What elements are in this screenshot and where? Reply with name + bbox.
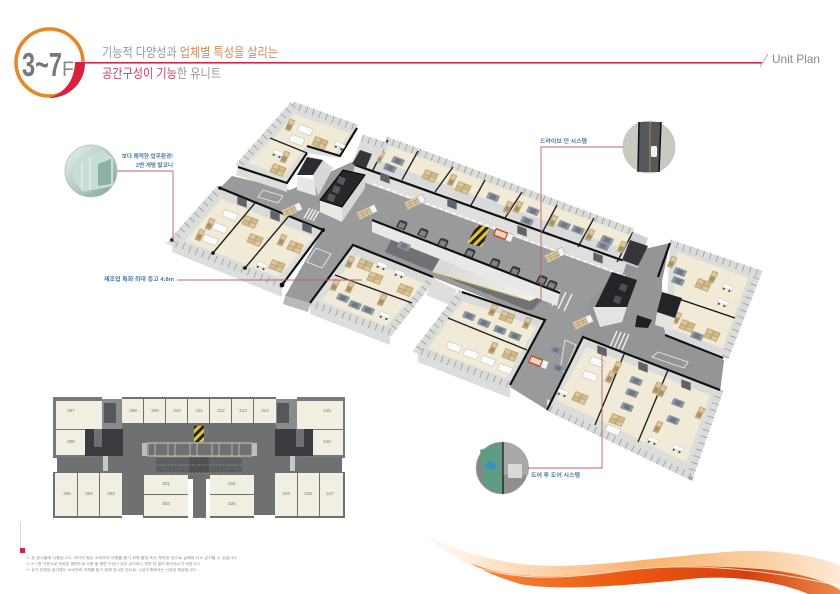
lower centre units: 301 — [162, 481, 170, 486]
header rule and Unit Plan label: Unit Plan — [772, 52, 820, 66]
lower right units — [275, 473, 343, 516]
callout text: door to door: 도어 투 도어 시스템 — [531, 471, 580, 479]
callout text: balcony: 보다 쾌적한 업무환경! — [122, 152, 173, 160]
upper row units — [122, 399, 276, 423]
callout: balcony photo — [65, 145, 117, 197]
floor markings — [258, 190, 688, 372]
ramp — [156, 457, 242, 473]
lower centre units: 302 — [162, 501, 170, 506]
header badge: 3~7F — [16, 29, 85, 98]
upper row units: 308 — [129, 408, 137, 413]
right side units: 316 — [323, 439, 331, 444]
upper row units: 313 — [239, 408, 247, 413]
lower right units: 319 — [282, 491, 290, 496]
upper row units: 312 — [217, 408, 225, 413]
3D isometric floor plan — [170, 105, 758, 480]
lower centre units — [144, 475, 254, 516]
lower left units: 303 — [107, 491, 115, 496]
callout leader: door to door — [528, 352, 602, 468]
decorative orange swoosh — [405, 516, 840, 594]
lower right units: 317 — [326, 491, 334, 496]
heading line 1: 기능적 다양성과 업체별 특성을 살리는 — [102, 45, 278, 60]
left side units: 306 — [67, 439, 75, 444]
lower centre units: 320 — [228, 501, 236, 506]
lower left units: 304 — [85, 491, 93, 496]
parking row — [142, 443, 257, 456]
right side units: 315 — [323, 408, 331, 413]
lower centre units: 321 — [228, 481, 236, 486]
header badge: 3~7F: F — [62, 58, 74, 81]
upper row units: 314 — [261, 408, 269, 413]
footnotes: ※ 본 광고물에 사용된 CG, 이미지 등은 소비자의 이해를 돕기 위해 촬영 또는 제작한 것으로 실제와 다소 상이할 수 있습니다. — [26, 555, 238, 560]
footnote marker — [20, 522, 25, 553]
right side corridor — [580, 243, 724, 392]
right cores — [593, 232, 682, 330]
callout photo: door to door — [476, 442, 529, 494]
lower right block — [547, 337, 720, 480]
2D key floor plan — [53, 397, 345, 518]
connector between center blocks — [426, 278, 457, 305]
left side units — [56, 401, 102, 455]
footnotes — [26, 555, 238, 572]
elevator core left — [297, 157, 365, 222]
callout leader: ceiling height — [177, 279, 362, 281]
callout text: ceiling height: 제조업 특화 최대 층고 4.8m — [104, 275, 174, 283]
core dark rooms — [85, 403, 313, 471]
center right block — [418, 292, 545, 398]
right block — [658, 243, 758, 358]
corridor and frame — [53, 397, 345, 518]
lower left units — [55, 473, 122, 516]
footnotes: ※ 3~7층 기준으로 작성된 평면도로 각층 별 평면 구성이 일부 상이하니 계약 전 필히 확인하시기 바랍니다. — [26, 561, 201, 566]
callout text: drive-in: 드라이브 인 시스템 — [540, 137, 587, 145]
hazard marking — [467, 225, 490, 247]
upper row units — [352, 140, 633, 276]
center left block — [310, 245, 433, 345]
lower corridor facade — [283, 296, 310, 312]
callout leader: drive-in — [541, 147, 623, 303]
lower left units: 305 — [63, 491, 71, 496]
upper left block — [236, 105, 357, 192]
left block — [170, 186, 325, 297]
top small core — [352, 138, 386, 168]
right side units — [297, 401, 343, 455]
header badge: 3~7F: 3~7 — [22, 46, 62, 83]
callout text: balcony: 2면 개방 발코니 — [136, 161, 173, 169]
callout leader: balcony — [117, 171, 173, 241]
lower right units: 318 — [304, 491, 312, 496]
central ramp island — [372, 220, 560, 310]
corridor vehicles — [281, 194, 594, 373]
heading line 2: 공간구성이 기능한 유니트 — [102, 66, 221, 81]
upper row units: 311 — [195, 408, 203, 413]
left side units: 307 — [67, 408, 75, 413]
upper row units: 309 — [151, 408, 159, 413]
header rule and Unit Plan label — [75, 52, 820, 67]
upper row units: 310 — [173, 408, 181, 413]
corridor floor — [220, 162, 724, 410]
callout photo: drive-in — [623, 121, 675, 173]
footnotes: ※ 상기 표현된 집기류는 소비자의 이해를 돕기 위해 표시한 것으로, 시공주체에서는 시공된 제공됩니다. — [26, 567, 197, 572]
hazard marking — [194, 426, 204, 442]
